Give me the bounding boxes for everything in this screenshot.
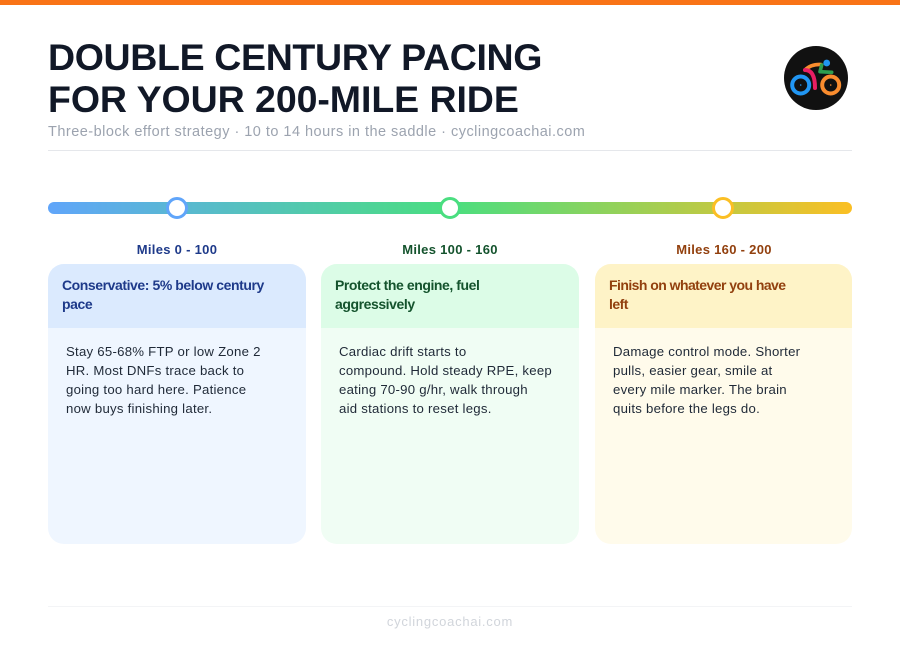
panel 3 body text: quits before the legs do. [613, 401, 760, 416]
panel 3 heading: Finish on whatever you have [609, 277, 786, 293]
title [48, 36, 542, 120]
panel: block 3 [595, 264, 852, 544]
panel 2 body text: aid stations to reset legs. [339, 401, 492, 416]
panel 2 body text: compound. Hold steady RPE, keep [339, 363, 552, 378]
footer divider [48, 606, 852, 607]
panel 3 heading: left [609, 296, 628, 312]
icon: cyclist logo [784, 46, 848, 110]
panel 3 body text: every mile marker. The brain [613, 382, 787, 397]
panel 1 body text: Stay 65-68% FTP or low Zone 2 [66, 344, 261, 359]
panel 1 body text: going too hard here. Patience [66, 382, 246, 397]
panel 3 body text: pulls, easier gear, smile at [613, 363, 772, 378]
title: FOR YOUR 200-MILE RIDE [48, 78, 519, 120]
label: miles 100-160: Miles 100 - 160 [402, 242, 498, 257]
panel 1 body text: now buys finishing later. [66, 401, 212, 416]
panel 1 heading: Conservative: 5% below century [62, 277, 264, 293]
timeline marker 2 [439, 197, 461, 219]
panel 2 body text [339, 344, 552, 416]
top accent bar [0, 0, 900, 5]
panel 3 header [595, 264, 852, 328]
title: DOUBLE CENTURY PACING [48, 36, 542, 78]
subtitle: Three-block effort strategy · 10 to 14 hours in the saddle · cyclingcoachai.com [48, 124, 585, 140]
panel 2 body text: eating 70-90 g/hr, walk through [339, 382, 528, 397]
panel: block 1 [48, 264, 306, 544]
panel 3 heading [609, 277, 786, 312]
panel: block 2 [321, 264, 579, 544]
header divider [48, 150, 852, 151]
panel 3 body text: Damage control mode. Shorter [613, 344, 800, 359]
footer text: cyclingcoachai.com [387, 614, 513, 629]
panel 1 heading [62, 277, 264, 312]
panel 2 heading: aggressively [335, 296, 415, 312]
panel 2 body text: Cardiac drift starts to [339, 344, 466, 359]
panel 2 heading [335, 277, 479, 312]
panel 3 body text [613, 344, 800, 416]
panel 1 body text [66, 344, 261, 416]
timeline [48, 202, 852, 214]
timeline marker 1 [166, 197, 188, 219]
panel 1 header [48, 264, 306, 328]
timeline gradient bar [48, 202, 852, 214]
label: miles 160-200: Miles 160 - 200 [676, 242, 772, 257]
timeline marker 3 [712, 197, 734, 219]
panel 1 heading: pace [62, 296, 92, 312]
panel 1 body text: HR. Most DNFs trace back to [66, 363, 244, 378]
panel 2 header [321, 264, 579, 328]
panel 2 heading: Protect the engine, fuel [335, 277, 479, 293]
label: miles 0-100: Miles 0 - 100 [137, 242, 217, 257]
